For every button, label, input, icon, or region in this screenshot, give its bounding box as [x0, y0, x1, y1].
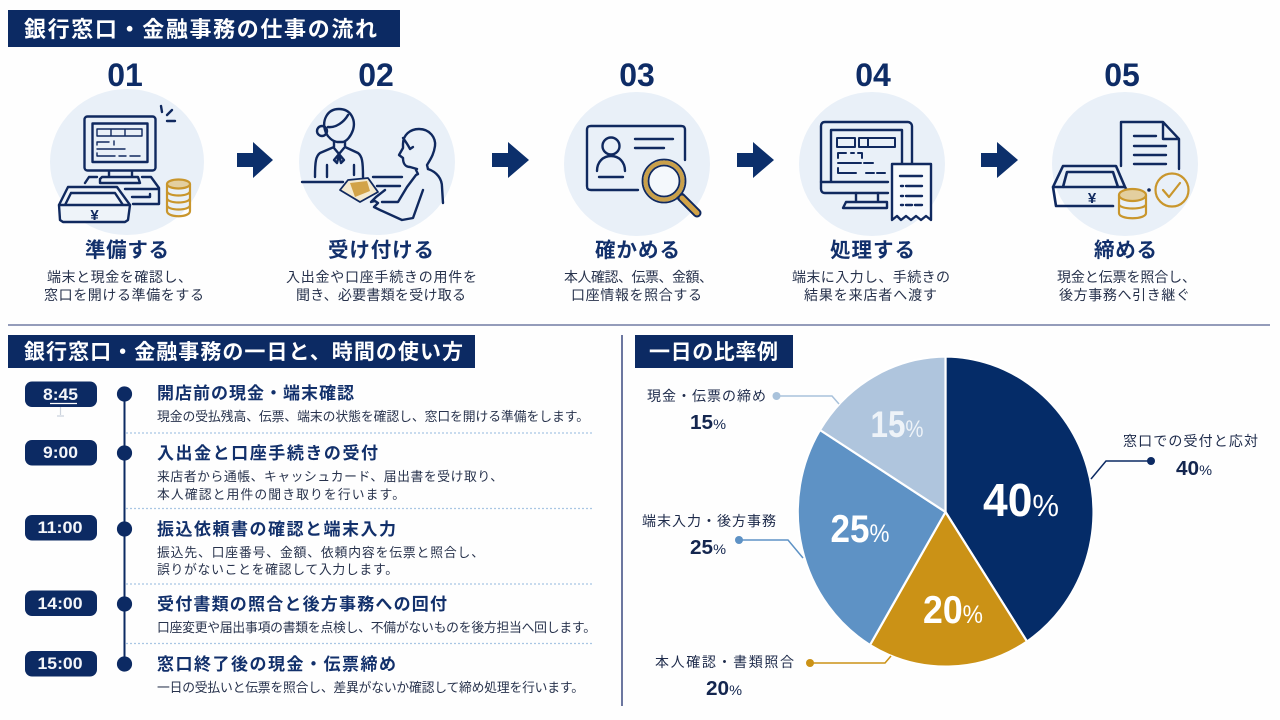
callout: identity check 20%: 本人確認・書類照合: [655, 654, 794, 670]
callout: counter reception 40%: [1091, 433, 1258, 480]
icon: cash tray, document and check: [1052, 92, 1198, 236]
step heading: 処理する: 処理する: [830, 239, 915, 262]
timeline item 14:00: 受付書類の照合と後方事務への回付: [157, 594, 447, 614]
timeline item 8:45: 開店前の現金・端末確認: [157, 383, 354, 403]
heading: a day and time use: [8, 335, 475, 368]
step description: [44, 269, 204, 303]
callout: cash and slip closing 15%: 現金・伝票の締め: [647, 388, 766, 404]
title: workflow heading: [8, 10, 400, 47]
timeline item 15:00: 一日の受払いと伝票を照合し、差異がないか確認して締め処理を行います。: [157, 680, 584, 695]
timeline item 9:00: 本人確認と用件の聞き取りを行います。: [157, 487, 405, 502]
timeline item 14:00: 14:00: [38, 594, 82, 613]
timeline item 11:00: 誤りがないことを確認して入力します。: [157, 562, 398, 577]
woman head: [324, 109, 354, 142]
timeline item 8:45: [25, 382, 589, 424]
step description: 入出金や口座手続きの用件を: [286, 269, 477, 285]
step heading: 受け付ける: 受け付ける: [328, 239, 434, 262]
step 02: receive: [286, 57, 477, 303]
step number 03: 03: [619, 57, 655, 93]
timeline item 14:00: [25, 590, 596, 635]
timeline item 15:00: 窓口終了後の現金・伝票締め: [157, 654, 396, 674]
timeline item 8:45: 8:45: [43, 385, 78, 404]
step description: 本人確認、伝票、金額、: [564, 269, 713, 285]
callout: terminal input 25%: [642, 513, 803, 559]
icon: terminal, cash tray and coins: [50, 89, 204, 235]
step description: 現金と伝票を照合し、: [1057, 269, 1196, 285]
title: workflow heading: 銀行窓口・金融事務の仕事の流れ: [24, 17, 377, 42]
callout: cash and slip closing 15%: [647, 388, 839, 434]
step description: [564, 269, 713, 303]
timeline item 11:00: 振込先、口座番号、金額、依頼内容を伝票と照合し、: [157, 545, 484, 560]
timeline item 11:00: [25, 515, 484, 577]
pie value: 20%: 20%: [923, 589, 983, 632]
timeline item 9:00: 入出金と口座手続きの受付: [157, 443, 378, 463]
icon: teller and visitor at counter: [299, 89, 455, 235]
icon: terminal, cash tray and coins: ¥: [90, 207, 99, 224]
step description: 口座情報を照合する: [571, 287, 702, 303]
timeline item 9:00: [25, 440, 503, 502]
step heading: 確かめる: 確かめる: [595, 239, 680, 262]
callout: identity check 20%: [655, 654, 891, 700]
timeline item 15:00: 15:00: [38, 654, 82, 673]
step number 02: 02: [358, 57, 394, 93]
heading: daily ratio: 一日の比率例: [649, 341, 778, 364]
step heading: 準備する: 準備する: [85, 239, 169, 262]
step 04: process: [792, 57, 950, 303]
timeline item 11:00: 振込依頼書の確認と端末入力: [157, 519, 396, 539]
step 05: close: [1052, 57, 1198, 303]
arrow 4: [981, 142, 1018, 178]
step description: 端末に入力し、手続きの: [792, 269, 950, 285]
icon: ID card and magnifier: [564, 92, 710, 236]
timeline item 14:00: 口座変更や届出事項の書類を点検し、不備がないものを後方担当へ回します。: [157, 620, 596, 635]
step description: 端末と現金を確認し、: [47, 269, 192, 285]
man head: [399, 129, 435, 169]
step number 05: 05: [1104, 57, 1140, 93]
step description: 聞き、必要書類を受け取る: [296, 287, 466, 303]
callout: identity check 20%: 20%: [706, 678, 742, 700]
callout: counter reception 40%: 40%: [1176, 458, 1212, 480]
callout: terminal input 25%: 25%: [690, 537, 726, 559]
callout: terminal input 25%: 端末入力・後方事務: [642, 513, 776, 529]
callout: counter reception 40%: 窓口での受付と応対: [1123, 433, 1258, 449]
timeline item 8:45: 現金の受払残高、伝票、端末の状態を確認し、窓口を開ける準備をします。: [157, 409, 589, 424]
step 01: prepare: [44, 57, 204, 303]
callout: cash and slip closing 15%: 15%: [690, 412, 726, 434]
step description: 窓口を開ける準備をする: [44, 287, 204, 303]
arrow 3: [737, 142, 774, 178]
step heading: 締める: 締める: [1094, 239, 1157, 262]
step number 04: 04: [855, 57, 891, 93]
step description: 結果を来店者へ渡す: [804, 287, 937, 303]
step description: [1057, 269, 1196, 303]
pie value: 25%: 25%: [830, 508, 890, 551]
pie value: 40%: 40%: [983, 474, 1059, 526]
step description: 後方事務へ引き継ぐ: [1059, 287, 1190, 303]
icon: cash tray, document and check: ¥: [1088, 190, 1097, 207]
step description: [286, 269, 477, 303]
step 03: verify: [564, 57, 713, 303]
heading: daily ratio: [635, 335, 793, 368]
timeline: [25, 382, 596, 695]
pie value: 15%: 15%: [870, 404, 924, 445]
timeline item 9:00: 来店者から通帳、キャッシュカード、届出書を受け取り、: [157, 469, 503, 484]
arrow 1: [237, 142, 273, 178]
icon: monitor and receipt: [799, 92, 945, 236]
timeline item 15:00: [25, 651, 584, 695]
step number 01: 01: [107, 57, 143, 93]
arrow 2: [492, 142, 529, 178]
timeline item 9:00: 9:00: [43, 443, 78, 462]
pie chart: [798, 356, 1094, 667]
timeline item 11:00: 11:00: [38, 518, 82, 537]
step description: [792, 269, 950, 303]
heading: a day and time use: 銀行窓口・金融事務の一日と、時間の使い方: [24, 340, 463, 364]
